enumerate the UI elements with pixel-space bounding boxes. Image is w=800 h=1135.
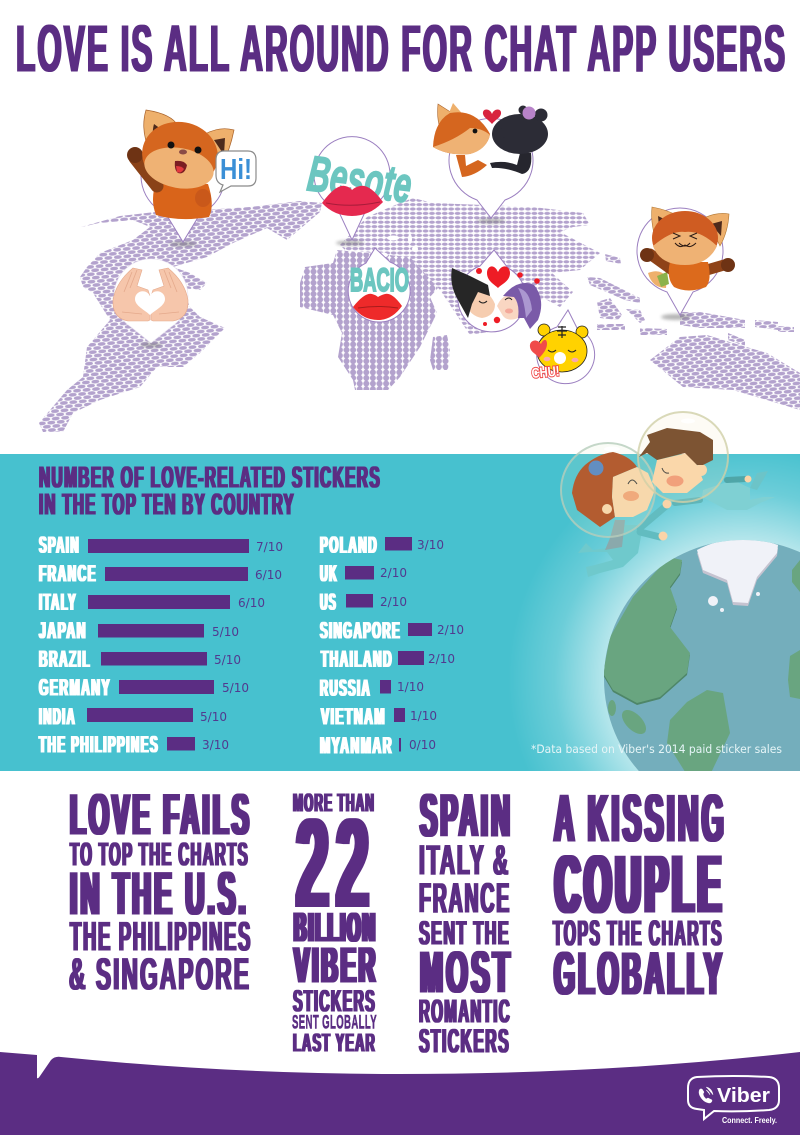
bar chart: left column: INDIA (39, 704, 76, 730)
bar chart: left column: SPAIN (39, 532, 80, 559)
map: australia (650, 335, 800, 410)
text: VIBER (294, 936, 378, 994)
fox mouth (175, 161, 187, 173)
fox head (137, 116, 223, 194)
fox tail and arm (456, 155, 487, 177)
text: ROMANTIC (419, 992, 511, 1030)
bar chart: right column: 3/10 (417, 538, 444, 552)
pin shadows (140, 218, 691, 348)
ice cap (697, 542, 778, 606)
continent bottom (667, 690, 730, 775)
map: asian islands (587, 254, 794, 346)
fox head (433, 112, 490, 154)
footer band (0, 1052, 800, 1135)
islands (608, 700, 616, 716)
girl face (497, 295, 520, 320)
fox ears (144, 110, 178, 152)
footnote: *Data based on Viber's 2014 paid sticker sales (531, 742, 782, 756)
girl suit (578, 525, 643, 577)
bar chart: left column: THE PHILIPPINES (39, 732, 159, 758)
globe (604, 540, 800, 771)
sticker pin: kissing foxes (433, 103, 548, 218)
bar chart: left column: 5/10 (222, 681, 249, 695)
girl flower (588, 460, 604, 476)
chart heading: IN THE TOP TEN BY COUNTRY (39, 486, 295, 522)
bar chart: right column: 0/10 (409, 738, 436, 752)
bar chart: right column: 1/10 (397, 680, 424, 694)
bar chart: left column: BRAZIL (39, 646, 91, 673)
text block: spain italy france (419, 782, 513, 1060)
girl hair (572, 452, 637, 527)
text: MORE THAN (293, 788, 375, 818)
text: 22 (296, 792, 376, 934)
text: SPAIN (420, 782, 513, 850)
ears (652, 207, 678, 246)
tiger face (557, 326, 567, 338)
bar chart: right column: VIETNAM (321, 704, 386, 730)
boy suit (702, 480, 775, 510)
tiger head (537, 330, 587, 372)
logo phone icon (699, 1087, 713, 1103)
bar chart: right column: POLAND (320, 532, 378, 559)
bar chart: right column: UK (320, 560, 338, 588)
bar chart: right column: RUSSIA (320, 675, 371, 702)
bar chart: left column: ITALY (39, 589, 77, 616)
text: LOVE FAILS (70, 782, 252, 848)
bar chart: left column: JAPAN (39, 618, 87, 644)
sticker pin: bacio lips (348, 248, 410, 322)
text: MOST (420, 938, 513, 1006)
bar chart: left column: 6/10 (255, 568, 282, 582)
panel: sticker chart band: NUMBER OF LOVE-RELATED STICKERS (39, 460, 381, 494)
panther head (492, 114, 548, 154)
lips (322, 186, 383, 216)
text block: love fails (69, 782, 252, 1000)
bar chart: right column: 2/10 (437, 623, 464, 637)
map: eurasia (340, 198, 600, 335)
panther body (490, 153, 531, 174)
girl hair (503, 283, 541, 329)
text: THE PHILIPPINES (70, 912, 252, 960)
text block: 22 billion stickers: SENT GLOBALLY (292, 1013, 377, 1034)
left hand (113, 268, 150, 321)
boy face (466, 288, 495, 318)
bar chart: left column: GERMANY (39, 674, 111, 702)
text: BILLION (294, 904, 377, 950)
bar chart: right column: 2/10 (380, 566, 407, 580)
bar chart: right column: 2/10 (380, 595, 407, 609)
flower (522, 106, 536, 120)
sticker pin: tiger (530, 310, 595, 384)
text block: 22 billion stickers (292, 788, 378, 1058)
text: STICKERS (293, 982, 376, 1018)
bar chart: left column: 5/10 (212, 625, 239, 639)
fox hand (195, 189, 211, 207)
astronaut girl (561, 443, 672, 577)
bar chart: left column: FRANCE (39, 560, 97, 588)
bar chart: left column: 5/10 (200, 710, 227, 724)
text block: 22 billion stickers: LAST YEAR (293, 1028, 376, 1058)
sticker pin: hugging fox (637, 207, 735, 315)
map: north and south america (39, 201, 322, 432)
bar chart: right column: THAILAND (321, 646, 393, 673)
tiger ears (538, 324, 550, 336)
big heart (487, 266, 510, 288)
small hearts (476, 268, 540, 326)
sticker pin: besote lips (305, 137, 415, 240)
text: TO TOP THE CHARTS (70, 836, 249, 872)
text: FRANCE (419, 876, 511, 922)
chart heading (39, 460, 381, 522)
bar chart: right column: 2/10 (428, 652, 455, 666)
speech bubble: hi: Hi! (220, 154, 252, 186)
sticker pin: heart hands (113, 259, 188, 343)
girl helmet (561, 443, 655, 537)
boy helmet (638, 412, 728, 502)
text: IN THE U.S. (70, 860, 249, 928)
bar chart: left column: 7/10 (256, 540, 283, 554)
tail and leaf (648, 271, 667, 288)
bar chart: left column: 6/10 (238, 596, 265, 610)
logo wordmark: Viber (717, 1085, 770, 1107)
viber logo (688, 1076, 779, 1125)
astronaut boy (638, 412, 775, 510)
head (652, 211, 718, 265)
text block: love fails: & SINGAPORE (69, 948, 251, 1000)
bar chart: right column (320, 532, 464, 760)
logo tagline: Connect. Freely. (722, 1116, 777, 1125)
logo bubble (688, 1076, 779, 1119)
bar chart: right column: 1/10 (410, 709, 437, 723)
bar chart: left column (39, 532, 283, 758)
bar chart: left column: 5/10 (214, 653, 241, 667)
map: madagascar (430, 335, 450, 370)
sticker pin: fox saying hi (127, 110, 256, 242)
continent left (603, 560, 690, 705)
world map (39, 198, 800, 432)
map: africa (300, 250, 438, 390)
besote word: Besote (305, 145, 415, 214)
boy face (652, 453, 703, 493)
heart (483, 110, 501, 124)
text: STICKERS (419, 1022, 510, 1060)
girl face (612, 467, 655, 517)
bar chart: left column: 3/10 (202, 738, 229, 752)
text: SENT THE (419, 914, 510, 952)
lips (353, 294, 402, 320)
chu label: CHU! (531, 363, 560, 381)
right hand (151, 268, 188, 321)
bar chart: right column: MYANMAR (320, 732, 393, 760)
panel: sticker chart band (0, 411, 800, 771)
continent right (788, 650, 800, 699)
bar chart: right column: US (320, 589, 337, 616)
bacio word: BACIO (350, 262, 409, 298)
sticker pin: anime couple kissing (451, 250, 541, 332)
boy hair (639, 428, 713, 465)
girl scarf (605, 520, 625, 550)
fox body (153, 182, 212, 219)
body (669, 262, 710, 290)
boy hair (451, 268, 490, 318)
text block: spain italy france: ITALY & (419, 838, 510, 884)
arms (650, 254, 675, 272)
fox ears (438, 104, 460, 135)
heart gap (135, 291, 165, 315)
bar chart: right column: SINGAPORE (320, 618, 401, 644)
tiger heart (530, 340, 547, 358)
text block: kissing couple (553, 782, 727, 1008)
fox arm (135, 158, 157, 186)
